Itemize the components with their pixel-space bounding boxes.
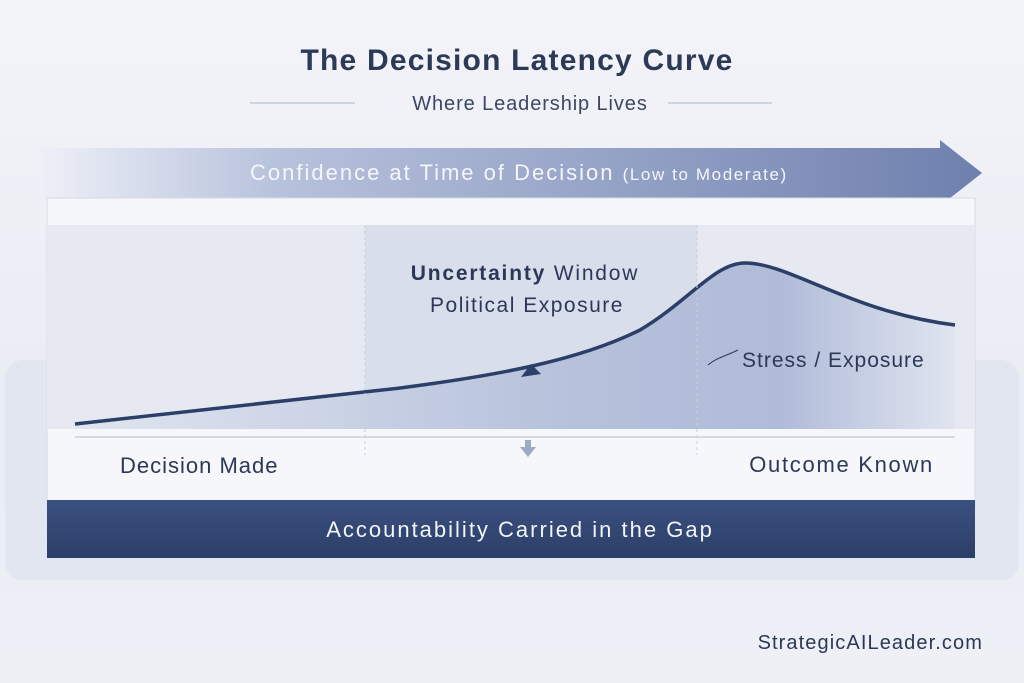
- bar: accountability: [47, 500, 975, 558]
- label: political exposure: Political Exposure: [430, 294, 624, 317]
- arrow: confidence: [40, 140, 982, 206]
- label: decision made: Decision Made: [120, 453, 279, 478]
- title: The Decision Latency Curve: [300, 44, 734, 77]
- marker triangle: [521, 364, 541, 377]
- footer: StrategicAILeader.com: [758, 632, 983, 654]
- curve: [75, 263, 955, 424]
- subtitle: Where Leadership Lives: [412, 93, 648, 115]
- curve area: [75, 263, 955, 429]
- panel: chart: [47, 198, 975, 508]
- uncertainty window: [365, 225, 697, 429]
- label: outcome known: Outcome Known: [749, 452, 934, 477]
- label: uncertainty window: Uncertainty Window: [411, 262, 639, 285]
- label: stress: Stress / Exposure: [742, 349, 925, 372]
- down arrow: [520, 440, 536, 457]
- arrow: confidence: Confidence at Time of Decision (Low to Moderate): [250, 160, 788, 185]
- bar: accountability: Accountability Carried in the Gap: [326, 517, 714, 542]
